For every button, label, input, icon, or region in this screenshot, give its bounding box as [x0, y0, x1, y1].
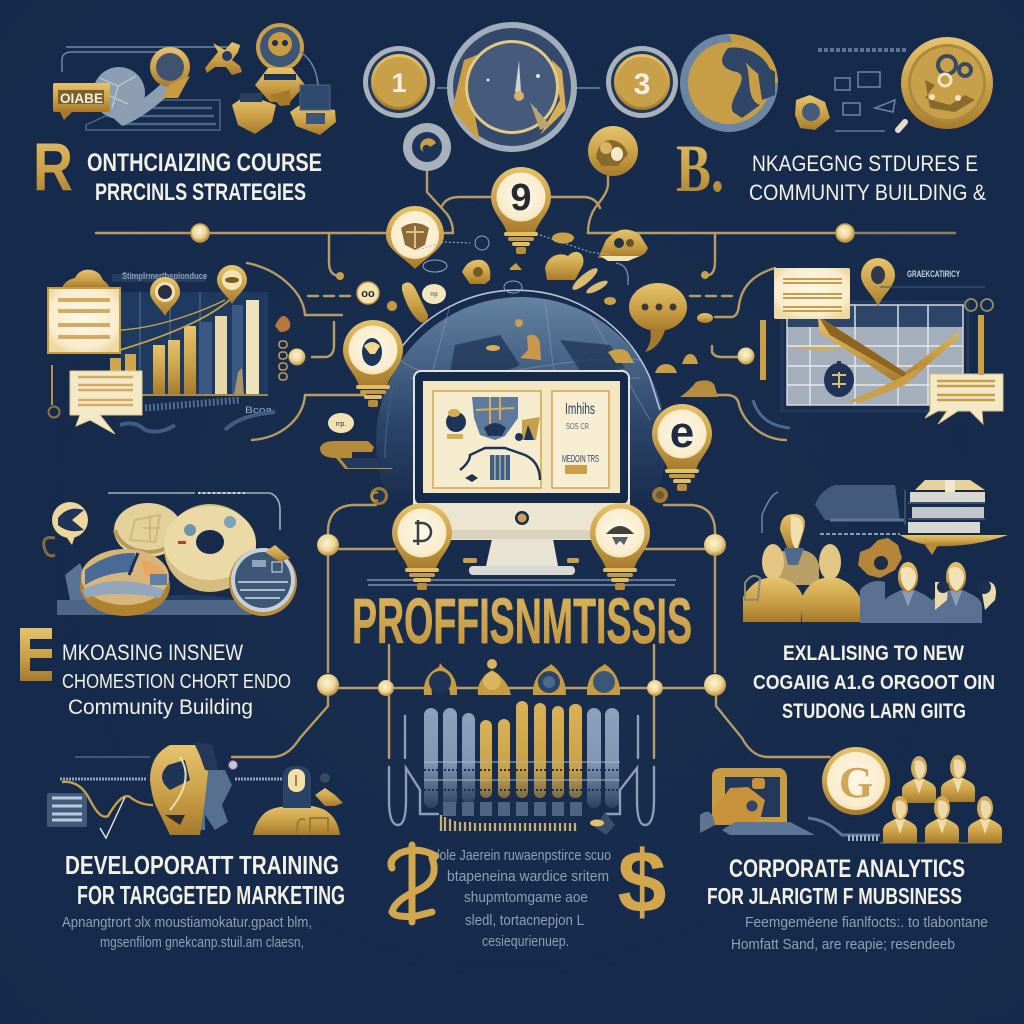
- connector nodes: left and right: [317, 534, 726, 696]
- heading: training: FOR TARGGETED MARKETING: [77, 880, 345, 910]
- small icons: left of monitor: rrp.: [336, 421, 346, 428]
- heading: mid right: EXLALISING TO NEW: [783, 642, 964, 665]
- screen labels: [562, 401, 599, 474]
- illustration: world map and gear, top right: [680, 34, 993, 132]
- paragraph: corporate: [731, 914, 988, 953]
- paragraph: centre: cesiequrienuep.: [482, 933, 569, 950]
- illustration: people and books, middle right: [743, 480, 1008, 623]
- pin: shield: [386, 206, 444, 269]
- heading: community building: NKAGEGNG STDURES E: [752, 151, 978, 176]
- paragraph: centre: shupmtomgame aoe: [464, 889, 588, 906]
- paragraph: training: Apnangtrort ɔlx moustiamokatur.gpact blm,: [62, 914, 312, 931]
- gauge: central dial: [447, 22, 577, 152]
- heading: pricing strategies: [87, 149, 322, 206]
- illustration: bar chart with notes, middle left: Bcoa: [245, 405, 272, 415]
- label: badge: [53, 83, 110, 120]
- map pin: [861, 258, 895, 307]
- heading: mid left: [62, 640, 291, 719]
- paragraph: centre: btapeneina wardice sritem: [447, 868, 609, 885]
- head icons row: [424, 659, 620, 695]
- heading: mid left: Community Building: [68, 696, 253, 719]
- paragraph: corporate: Homfatt Sand, are reapie; resendeeb: [731, 936, 955, 953]
- connector nodes: top row: [191, 224, 854, 280]
- small icons: left of monitor: [320, 413, 668, 505]
- heading: mid left: CHOMESTION CHORT ENDO: [62, 671, 291, 693]
- icon: small grey dial: [403, 123, 451, 171]
- icon: right dollar: $: [618, 832, 666, 931]
- monitor: [413, 370, 630, 575]
- scatter icons around the globe: [357, 230, 718, 397]
- badge: [824, 361, 854, 397]
- heading: corporate analytics: [707, 855, 965, 909]
- heading: letter R: R: [33, 129, 73, 205]
- illustration: pie and donut charts, middle left: [44, 493, 297, 616]
- bulb: number 9: [491, 167, 551, 254]
- illustration: laptop gears and team, bottom right: [700, 747, 1002, 843]
- heading: training: DEVELOPORATT TRAINING: [65, 850, 339, 880]
- bulb: left shield: [343, 320, 403, 407]
- note card: [774, 268, 850, 319]
- paragraph: centre: /ole Jaerein ruwaenpstirce scuo: [436, 847, 611, 864]
- small gold details on stand: [463, 558, 579, 563]
- icon: gold cog: [588, 126, 638, 176]
- illustration: bar chart with notes, middle left: Stimplrmertbspionduce: [122, 271, 207, 281]
- illustration: pricing strategy tools, top left: [53, 23, 336, 135]
- paragraph: centre: sledl, tortacnepjon L: [465, 912, 584, 929]
- badge: number 1: 1: [391, 68, 407, 98]
- heading: community building: COMMUNITY BUILDING &: [749, 180, 986, 205]
- screen labels: MEDOIN TRS: [562, 454, 599, 465]
- heading: letter B: B.: [676, 130, 724, 206]
- illustration: spreadsheet and arrow, middle right: GRAEKCATIRICY: [907, 269, 960, 279]
- screen labels: SOS CR: [566, 422, 589, 431]
- heading: mid left: MKOASING INSNEW: [62, 640, 243, 665]
- illustration: spreadsheet and arrow, middle right: [697, 258, 1003, 428]
- icon: speech gear: [44, 502, 88, 556]
- map pin: [217, 265, 247, 304]
- note card with tail: [925, 374, 1003, 424]
- heading: community building: [749, 151, 986, 205]
- label: badge: OIABE: [60, 90, 103, 106]
- heading: pricing strategies: ONTHCIAIZING COURSE: [87, 149, 322, 177]
- scatter icons around the globe: rrp: [430, 292, 438, 298]
- heading: mid right: COGAIIG A1.G ORGOOT OIN: [753, 672, 995, 694]
- screen labels: Imhihs: [565, 401, 595, 418]
- bulb: letter e: [652, 404, 712, 491]
- bulb: hat: [590, 503, 650, 590]
- illustration: training head and person, bottom left: [47, 742, 343, 838]
- icon: left dollar: [391, 845, 436, 922]
- paragraph: centre: [436, 847, 611, 950]
- heading: pricing strategies: PRRCINLS STRATEGIES: [95, 179, 306, 206]
- illustration: bar chart with notes, middle left: [48, 265, 306, 434]
- badge: number 3: 3: [634, 68, 650, 101]
- map pin: [150, 277, 180, 316]
- paragraph: training: [62, 914, 312, 951]
- bulb: number 9: 9: [510, 177, 532, 219]
- heading: training: [65, 850, 345, 910]
- note card: [48, 270, 120, 353]
- bulb: letter e: e: [670, 408, 694, 457]
- illustration: laptop gears and team, bottom right: G: [839, 758, 873, 807]
- paragraph: training: mgsenfilom gnekcanp.stuil.am claesn,: [100, 934, 304, 951]
- heading: mid right: [753, 642, 995, 723]
- badge: number 1: [363, 46, 435, 118]
- paragraph: corporate: Feemgemëene fianlfocts:. to tlabontane: [745, 914, 988, 931]
- title: PROFFISNMTISSIS: [352, 585, 692, 657]
- world globe behind the monitor: [376, 290, 666, 587]
- badge: number 3: [606, 46, 678, 118]
- bar chart: [389, 701, 654, 835]
- note card with tail: [70, 371, 142, 434]
- glass dial: [229, 548, 297, 616]
- heading: mid right: STUDONG LARN GIITG: [782, 700, 966, 723]
- connector network: [96, 88, 955, 758]
- divider line under monitor: [367, 580, 676, 585]
- bulb: rupee: [392, 503, 452, 590]
- scatter icons around the globe: oo: [361, 288, 375, 300]
- heading: letter E: [20, 628, 52, 681]
